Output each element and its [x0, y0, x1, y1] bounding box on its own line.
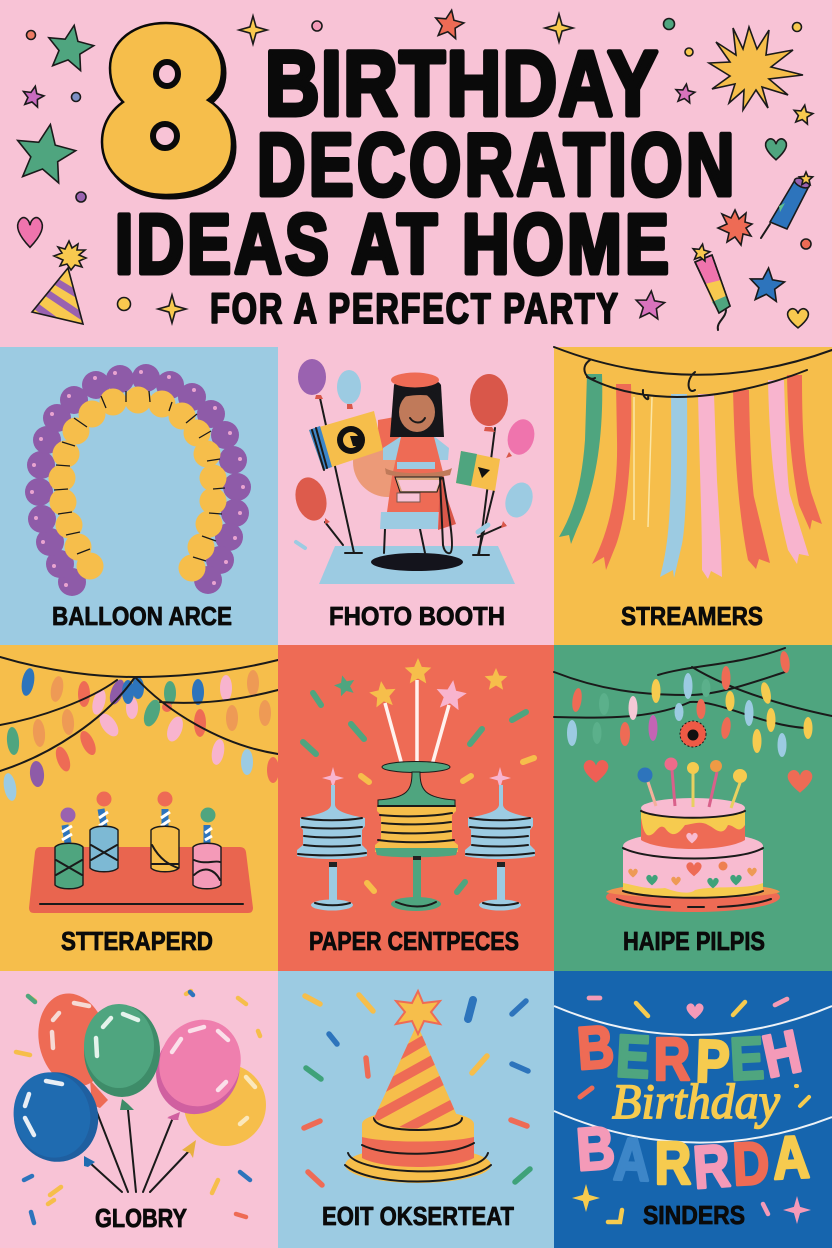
balloon: green [84, 1004, 160, 1110]
big numeral 8 [102, 23, 235, 198]
banner text: B [574, 1114, 617, 1183]
icon: sunburst [709, 27, 803, 110]
decorations [572, 998, 811, 1224]
banner text: B [575, 1013, 616, 1082]
icon: stars [12, 8, 814, 319]
confetti [303, 693, 534, 892]
hearts [584, 760, 812, 793]
label: PAPER CENTPECES [309, 926, 519, 956]
balloon arch [25, 364, 251, 596]
panel: streamers [554, 347, 832, 645]
icon: dots [26, 18, 811, 310]
title: IDEAS AT HOME [115, 197, 669, 291]
panel: cake [554, 645, 832, 971]
sign: right [456, 451, 500, 491]
banner text: P [695, 1027, 731, 1096]
banner text: R [654, 1026, 690, 1093]
person [353, 372, 456, 553]
title: DECORATION [257, 115, 734, 214]
label: GLOBRY [95, 1203, 187, 1233]
tiered stand: left [297, 767, 367, 910]
tiered stand: right [465, 767, 535, 910]
balloon: pink [141, 1006, 255, 1128]
panel: party hat cake [278, 971, 554, 1248]
table [29, 847, 253, 913]
balloon: blue [4, 1063, 108, 1171]
floor shadow [371, 553, 463, 571]
banner text: R [655, 1130, 691, 1197]
balloon: yellow [182, 1064, 266, 1158]
icon: hearts [18, 139, 808, 328]
ribbons [559, 374, 822, 579]
label: EOIT OKSERTEAT [322, 1201, 514, 1231]
label: STTERAPERD [61, 926, 213, 956]
title: FOR A PERFECT PARTY [210, 285, 618, 333]
light strings [0, 657, 278, 771]
banner text: D [731, 1129, 771, 1198]
banner text: A [771, 1123, 811, 1192]
strings [90, 1110, 188, 1192]
bunting strings [554, 1006, 832, 1143]
flower [680, 721, 706, 747]
banner text: E [728, 1024, 765, 1093]
sign: left [309, 411, 383, 470]
panel: balloon arch [0, 347, 278, 645]
icon: party poppers [691, 172, 813, 330]
candles [55, 792, 221, 889]
label: HAIPE PILPIS [623, 926, 765, 956]
icon: party hat [30, 239, 88, 326]
star sticks [332, 658, 507, 765]
balloon: coral [30, 987, 116, 1108]
banner text: Birthday [612, 1073, 781, 1129]
icon: sparkles [158, 14, 573, 323]
panel: paper centerpieces [278, 645, 554, 971]
banner text: R [691, 1132, 732, 1201]
title [115, 32, 734, 333]
confetti [304, 995, 530, 1185]
banner text [574, 1013, 811, 1201]
label: SINDERS [643, 1200, 745, 1230]
label: STREAMERS [621, 601, 763, 631]
light strings [554, 648, 832, 728]
bulbs [2, 667, 279, 802]
confetti [16, 991, 260, 1223]
banner text: A [612, 1125, 651, 1194]
balloons on sticks [291, 359, 538, 555]
panel: photo booth [278, 347, 554, 645]
bulbs [567, 650, 812, 757]
floor mat [319, 546, 515, 584]
label: FHOTO BOOTH [329, 601, 505, 631]
cake [606, 758, 780, 912]
header [12, 8, 814, 335]
banner text: H [757, 1017, 807, 1090]
string [554, 347, 832, 399]
tiered stand: center [375, 762, 458, 911]
title: BIRTHDAY [265, 32, 658, 135]
panel: string lights and candles [0, 645, 279, 971]
hat cake [345, 991, 491, 1183]
panel: balloons [0, 971, 278, 1248]
label: BALLOON ARCE [52, 601, 232, 631]
panel: birthday banner [554, 971, 832, 1248]
banner text: E [615, 1022, 652, 1091]
